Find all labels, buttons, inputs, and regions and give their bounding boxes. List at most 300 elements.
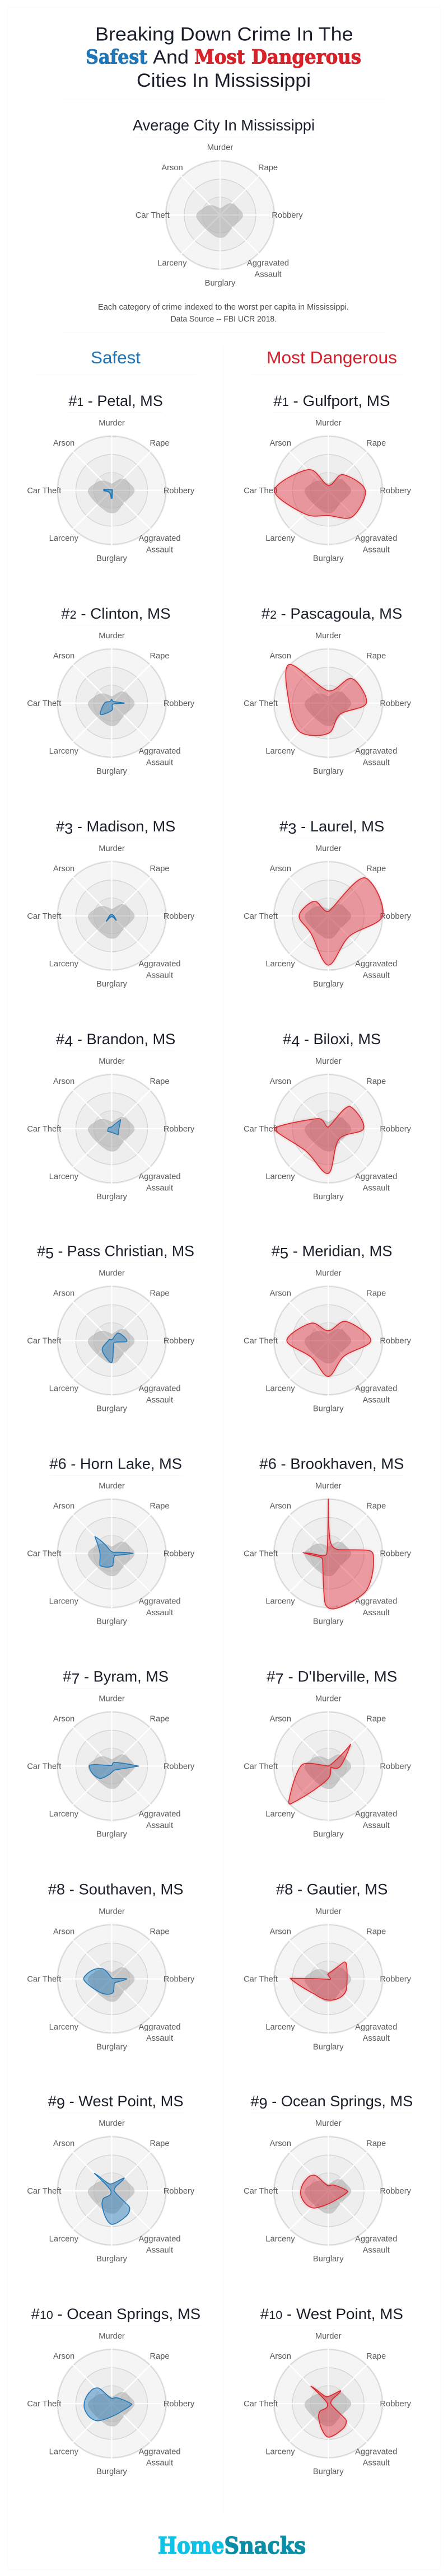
crime shape — [311, 2386, 346, 2437]
axis labels: Aggravated — [355, 1172, 397, 1181]
city heading: - Biloxi, MS — [300, 1031, 381, 1048]
city heading: # — [279, 818, 288, 835]
axis labels — [27, 844, 195, 989]
axis labels: Car Theft — [27, 1549, 61, 1558]
heading: average city: Average City In Mississippi — [133, 116, 315, 134]
axis labels: Rape — [150, 1927, 170, 1936]
axis labels: Assault — [146, 2459, 173, 2468]
axis labels: Arson — [53, 1714, 74, 1723]
axis labels — [244, 632, 412, 776]
crime shape — [274, 1106, 364, 1174]
axis labels — [244, 2332, 412, 2476]
axis labels: Arson — [53, 1502, 74, 1511]
axis labels: Robbery — [380, 1762, 412, 1771]
radar grid — [273, 435, 384, 545]
city heading: # — [267, 1668, 275, 1685]
axis labels: Burglary — [96, 1193, 127, 1201]
axis labels: Arson — [53, 1077, 74, 1086]
panel: safest #10 Ocean Springs — [27, 2306, 200, 2476]
axis labels — [27, 1907, 195, 2051]
axis labels: Aggravated — [138, 747, 181, 756]
axis labels: Arson — [53, 1927, 74, 1936]
axis labels: Murder — [99, 419, 125, 428]
panel: dangerous #6 Brookhaven — [244, 1455, 412, 1626]
axis labels: Assault — [363, 1821, 390, 1830]
panel: safest #4 Brandon — [27, 1031, 195, 1201]
axis labels: Arson — [270, 2352, 291, 2361]
axis labels: Murder — [99, 1907, 125, 1916]
axis labels: Robbery — [380, 1125, 412, 1134]
axis labels: Car Theft — [244, 487, 278, 495]
axis labels: Rape — [150, 864, 170, 873]
city heading: #2 - Clinton, MS — [61, 605, 171, 622]
crime shape — [290, 1962, 347, 2000]
axis labels: Assault — [146, 1396, 173, 1405]
panel: average city — [133, 116, 315, 288]
panel: dangerous #9 Ocean Springs — [244, 2093, 413, 2264]
axis labels: Aggravated — [355, 534, 397, 543]
axis labels: Larceny — [265, 1385, 295, 1394]
title — [86, 24, 361, 91]
axis labels: Larceny — [49, 1597, 79, 1606]
city heading: 3 — [64, 820, 73, 837]
city heading: - West Point, MS — [65, 2093, 184, 2110]
city heading: #1 - Petal, MS — [68, 392, 163, 409]
radar grid — [273, 2135, 384, 2246]
axis labels: Larceny — [265, 1597, 295, 1606]
axis labels: Arson — [53, 439, 74, 448]
axis labels — [244, 1907, 412, 2051]
title: And — [153, 47, 189, 68]
axis labels: Assault — [363, 2246, 390, 2255]
radar grid — [57, 2135, 167, 2246]
axis labels — [27, 1694, 195, 1839]
city heading: 3 — [288, 820, 296, 837]
axis labels: Rape — [150, 1714, 170, 1723]
axis labels: Robbery — [164, 2400, 195, 2409]
city heading: 9 — [259, 2095, 268, 2112]
panel: dangerous #3 Laurel — [244, 818, 412, 989]
crime shape — [100, 699, 124, 714]
axis labels: Larceny — [49, 534, 79, 543]
panel: dangerous #4 Biloxi — [244, 1031, 412, 1201]
axis labels: Murder — [99, 2332, 125, 2341]
axis labels: Rape — [150, 2139, 170, 2148]
axis labels: Aggravated — [138, 534, 181, 543]
axis labels: Arson — [270, 1927, 291, 1936]
axis labels: Assault — [363, 2034, 390, 2043]
axis labels: Robbery — [380, 1336, 412, 1345]
crime shape — [303, 1499, 374, 1609]
axis labels: Arson — [270, 864, 291, 873]
axis labels: Burglary — [96, 2467, 127, 2476]
city heading: #10 - Ocean Springs, MS — [31, 2306, 200, 2322]
title: Cities In Mississippi — [137, 70, 311, 91]
radar grid — [273, 2348, 384, 2459]
axis labels: Arson — [270, 1289, 291, 1298]
axis labels: Larceny — [49, 960, 79, 969]
axis labels — [244, 419, 412, 563]
axis labels: Rape — [150, 2352, 170, 2361]
axis labels: Larceny — [265, 1172, 295, 1181]
axis labels — [244, 1057, 412, 1201]
crime shape — [95, 1536, 133, 1567]
axis labels: Assault — [146, 2034, 173, 2043]
radar grid — [57, 648, 167, 758]
axis labels: Assault — [363, 1396, 390, 1405]
panel: dangerous #7 D'Iberville — [244, 1668, 412, 1839]
axis labels: Murder — [99, 632, 125, 641]
axis labels: Larceny — [49, 2447, 79, 2456]
axis labels: Burglary — [313, 2255, 344, 2264]
axis labels: Aggravated — [355, 2447, 397, 2456]
axis labels: Assault — [146, 1184, 173, 1193]
crime shape — [299, 878, 383, 965]
axis labels: Murder — [315, 1694, 342, 1703]
axis labels — [244, 1269, 412, 1413]
panel: safest #9 West Point — [27, 2093, 195, 2264]
axis labels: Robbery — [164, 487, 195, 495]
axis labels: Aggravated — [138, 1172, 181, 1181]
axis labels: Assault — [363, 759, 390, 768]
axis labels: Rape — [366, 1927, 386, 1936]
logo: HomeSnacks: Home — [158, 2532, 224, 2559]
axis labels: Robbery — [380, 1975, 412, 1984]
axis labels: Aggravated — [355, 1810, 397, 1819]
axis labels: Aggravated — [355, 2023, 397, 2032]
axis labels: Larceny — [49, 1810, 79, 1819]
city heading: 5 — [45, 1245, 54, 1261]
radar chart: average city — [136, 143, 303, 288]
axis labels — [27, 1481, 195, 1626]
axis labels: Robbery — [164, 1125, 195, 1134]
crime shape — [89, 1762, 139, 1778]
axis labels: Robbery — [164, 912, 195, 921]
axis labels — [244, 2119, 412, 2264]
axis labels: Burglary — [96, 554, 127, 563]
axis labels: Robbery — [164, 1336, 195, 1345]
axis labels: Burglary — [313, 1404, 344, 1413]
radar chart: average city: Aggravated — [247, 259, 289, 268]
radar grid — [273, 1711, 384, 1821]
axis labels: Car Theft — [27, 912, 61, 921]
radar grid — [57, 1924, 167, 2034]
axis labels: Larceny — [265, 2023, 295, 2032]
axis labels: Car Theft — [27, 1125, 61, 1134]
axis labels: Murder — [315, 1057, 342, 1066]
city heading: 4 — [64, 1033, 73, 1050]
city heading: - Pass Christian, MS — [54, 1242, 194, 1259]
axis labels: Assault — [363, 971, 390, 980]
radar grid — [273, 1285, 384, 1396]
radar grid — [273, 648, 384, 758]
axis labels: Rape — [366, 864, 386, 873]
axis labels: Robbery — [164, 2187, 195, 2196]
axis labels: Burglary — [313, 1617, 344, 1626]
axis labels: Murder — [99, 2119, 125, 2128]
axis labels: Burglary — [313, 767, 344, 776]
axis labels: Robbery — [164, 1762, 195, 1771]
city heading: - Ocean Springs, MS — [268, 2093, 413, 2110]
axis labels: Burglary — [313, 1193, 344, 1201]
axis labels: Car Theft — [244, 699, 278, 708]
axis labels — [27, 419, 195, 563]
city heading: #6 - Horn Lake, MS — [49, 1455, 182, 1472]
axis labels: Larceny — [49, 2023, 79, 2032]
axis labels — [27, 632, 195, 776]
axis labels: Car Theft — [27, 1975, 61, 1984]
axis labels: Assault — [146, 2246, 173, 2255]
city heading: # — [56, 1031, 64, 1048]
caption — [98, 303, 349, 324]
axis labels: Burglary — [313, 2042, 344, 2051]
axis labels: Burglary — [96, 1617, 127, 1626]
axis labels: Assault — [146, 1821, 173, 1830]
title: Safest — [86, 46, 147, 69]
heading: most dangerous: Most Dangerous — [267, 348, 397, 367]
axis labels: Car Theft — [27, 2400, 61, 2409]
radar grid — [273, 861, 384, 971]
axis labels: Rape — [150, 1289, 170, 1298]
axis labels: Assault — [146, 545, 173, 554]
axis labels: Arson — [53, 2352, 74, 2361]
axis labels: Assault — [363, 1184, 390, 1193]
city heading: # — [63, 1668, 71, 1685]
crime shape — [104, 489, 112, 498]
axis labels: Larceny — [49, 1385, 79, 1394]
axis labels: Rape — [366, 652, 386, 661]
axis labels: Car Theft — [244, 1125, 278, 1134]
axis labels: Murder — [315, 1907, 342, 1916]
heading: safest: Safest — [91, 348, 141, 367]
panel: dangerous #10 West Point — [244, 2306, 412, 2476]
axis labels: Arson — [270, 1714, 291, 1723]
axis labels: Larceny — [265, 1810, 295, 1819]
axis labels: Robbery — [164, 1975, 195, 1984]
axis labels: Murder — [315, 632, 342, 641]
caption: Each category of crime indexed to the worst per capita in Mississippi. — [98, 303, 349, 312]
caption: Data Source -- FBI UCR 2018. — [171, 315, 277, 324]
axis labels: Aggravated — [138, 2234, 181, 2243]
panel: dangerous #1 Gulfport — [244, 392, 412, 563]
axis labels: Murder — [99, 1694, 125, 1703]
city heading: # — [272, 1242, 280, 1259]
axis labels — [27, 1057, 195, 1201]
axis labels: Rape — [366, 1714, 386, 1723]
city heading: - Laurel, MS — [296, 818, 384, 835]
radar grid — [57, 861, 167, 971]
city heading: - Meridian, MS — [288, 1242, 393, 1259]
axis labels: Car Theft — [244, 2400, 278, 2409]
axis labels: Robbery — [380, 912, 412, 921]
panel: safest #3 Madison — [27, 818, 195, 989]
crime shape — [106, 914, 116, 921]
axis labels: Larceny — [265, 534, 295, 543]
axis labels: Larceny — [49, 747, 79, 756]
axis labels: Burglary — [96, 767, 127, 776]
axis labels — [27, 2119, 195, 2264]
axis labels: Arson — [53, 1289, 74, 1298]
axis labels — [244, 1694, 412, 1839]
axis labels — [27, 1269, 195, 1413]
logo: HomeSnacks — [158, 2532, 306, 2559]
axis labels: Larceny — [265, 2234, 295, 2243]
axis labels: Murder — [315, 1481, 342, 1490]
crime shape — [108, 1120, 121, 1135]
crime shape — [83, 1969, 127, 1994]
axis labels: Aggravated — [138, 960, 181, 969]
axis labels: Rape — [150, 652, 170, 661]
axis labels: Burglary — [96, 2042, 127, 2051]
panel: safest #2 Clinton — [27, 605, 195, 776]
axis labels: Murder — [315, 844, 342, 853]
panel: dangerous #5 Meridian — [244, 1242, 412, 1413]
radar chart: average city: Larceny — [157, 259, 187, 268]
radar grid — [57, 435, 167, 545]
axis labels: Car Theft — [27, 1336, 61, 1345]
axis labels: Aggravated — [355, 747, 397, 756]
axis labels: Robbery — [164, 1549, 195, 1558]
city heading: #8 - Southaven, MS — [48, 1881, 183, 1898]
axis labels: Arson — [270, 652, 291, 661]
axis labels: Burglary — [96, 1830, 127, 1839]
city heading: 4 — [291, 1033, 300, 1050]
axis labels: Car Theft — [244, 2187, 278, 2196]
axis labels: Robbery — [380, 487, 412, 495]
axis labels: Rape — [150, 439, 170, 448]
axis labels: Arson — [270, 1077, 291, 1086]
crime shape — [289, 1744, 351, 1804]
radar chart: average city: Burglary — [205, 279, 236, 288]
axis labels: Rape — [366, 1502, 386, 1511]
axis labels: Aggravated — [355, 1385, 397, 1394]
axis labels: Rape — [366, 1077, 386, 1086]
city heading: # — [56, 818, 64, 835]
city heading: #8 - Gautier, MS — [276, 1881, 388, 1898]
title: Most Dangerous — [194, 46, 361, 69]
axis labels: Murder — [315, 2332, 342, 2341]
axis labels: Arson — [53, 652, 74, 661]
axis labels: Assault — [363, 1609, 390, 1617]
axis labels: Burglary — [313, 2467, 344, 2476]
axis labels: Rape — [366, 1289, 386, 1298]
panel: safest #7 Byram — [27, 1668, 195, 1839]
axis labels: Murder — [99, 1057, 125, 1066]
axis labels — [244, 844, 412, 989]
city heading: #1 - Gulfport, MS — [273, 392, 390, 409]
radar grid — [273, 1924, 384, 2034]
axis labels: Assault — [146, 759, 173, 768]
axis labels: Burglary — [96, 1404, 127, 1413]
axis labels: Robbery — [164, 699, 195, 708]
radar grid — [57, 2348, 167, 2459]
axis labels: Car Theft — [244, 912, 278, 921]
city heading: 7 — [71, 1670, 80, 1687]
axis labels: Burglary — [313, 1830, 344, 1839]
axis labels: Murder — [315, 419, 342, 428]
axis labels: Robbery — [380, 1549, 412, 1558]
axis labels: Car Theft — [244, 1975, 278, 1984]
city heading: # — [48, 2093, 57, 2110]
panel: safest #1 Petal — [27, 392, 195, 563]
axis labels: Arson — [270, 439, 291, 448]
axis labels: Burglary — [313, 980, 344, 989]
radar chart: average city: Arson — [161, 163, 183, 172]
panel: safest #8 Southaven — [27, 1881, 195, 2051]
axis labels: Robbery — [380, 2187, 412, 2196]
axis labels — [27, 2332, 195, 2476]
axis labels: Murder — [99, 1481, 125, 1490]
axis labels: Aggravated — [138, 1597, 181, 1606]
axis labels: Car Theft — [244, 1549, 278, 1558]
axis labels: Robbery — [380, 2400, 412, 2409]
panel: safest #5 Pass Christian — [27, 1242, 195, 1413]
axis labels: Larceny — [49, 1172, 79, 1181]
city heading: 5 — [280, 1245, 288, 1261]
axis labels: Arson — [53, 864, 74, 873]
crime shape — [84, 2388, 132, 2421]
radar chart: average city: Rape — [258, 163, 278, 172]
radar grid — [57, 1073, 167, 1184]
crime shape — [301, 2175, 348, 2208]
axis labels: Car Theft — [27, 699, 61, 708]
title: Breaking Down Crime In The — [95, 24, 353, 45]
axis labels — [244, 1481, 412, 1626]
axis labels: Aggravated — [138, 1810, 181, 1819]
crime shape — [102, 1333, 127, 1363]
axis labels: Aggravated — [138, 2447, 181, 2456]
axis labels: Arson — [53, 2139, 74, 2148]
axis labels: Car Theft — [27, 1762, 61, 1771]
city heading: # — [37, 1242, 45, 1259]
panel: dangerous #8 Gautier — [244, 1881, 412, 2051]
crime shape — [94, 2173, 130, 2224]
axis labels: Car Theft — [244, 1336, 278, 1345]
crime shape — [286, 665, 367, 736]
axis labels: Car Theft — [244, 1762, 278, 1771]
city heading: # — [283, 1031, 291, 1048]
radar chart: average city: Car Theft — [136, 211, 170, 220]
crime shape — [274, 470, 366, 518]
axis labels: Rape — [366, 2352, 386, 2361]
axis labels: Aggravated — [355, 960, 397, 969]
axis labels: Car Theft — [27, 487, 61, 495]
axis labels: Rape — [150, 1502, 170, 1511]
radar grid — [57, 1711, 167, 1821]
radar grid — [57, 1285, 167, 1396]
axis labels: Aggravated — [138, 1385, 181, 1394]
axis labels: Rape — [366, 439, 386, 448]
axis labels: Assault — [146, 971, 173, 980]
axis labels: Burglary — [96, 980, 127, 989]
axis labels: Burglary — [313, 554, 344, 563]
axis labels: Murder — [99, 844, 125, 853]
axis labels: Murder — [99, 1269, 125, 1278]
axis labels: Aggravated — [355, 1597, 397, 1606]
axis labels: Assault — [363, 2459, 390, 2468]
axis labels: Car Theft — [27, 2187, 61, 2196]
radar grid — [57, 1498, 167, 1609]
city heading: # — [250, 2093, 259, 2110]
axis labels: Arson — [270, 2139, 291, 2148]
crime shape — [287, 1321, 371, 1376]
axis labels: Robbery — [380, 699, 412, 708]
axis labels: Larceny — [265, 960, 295, 969]
city heading: - Byram, MS — [80, 1668, 169, 1685]
axis labels: Arson — [270, 1502, 291, 1511]
axis labels: Assault — [146, 1609, 173, 1617]
axis labels: Assault — [363, 545, 390, 554]
